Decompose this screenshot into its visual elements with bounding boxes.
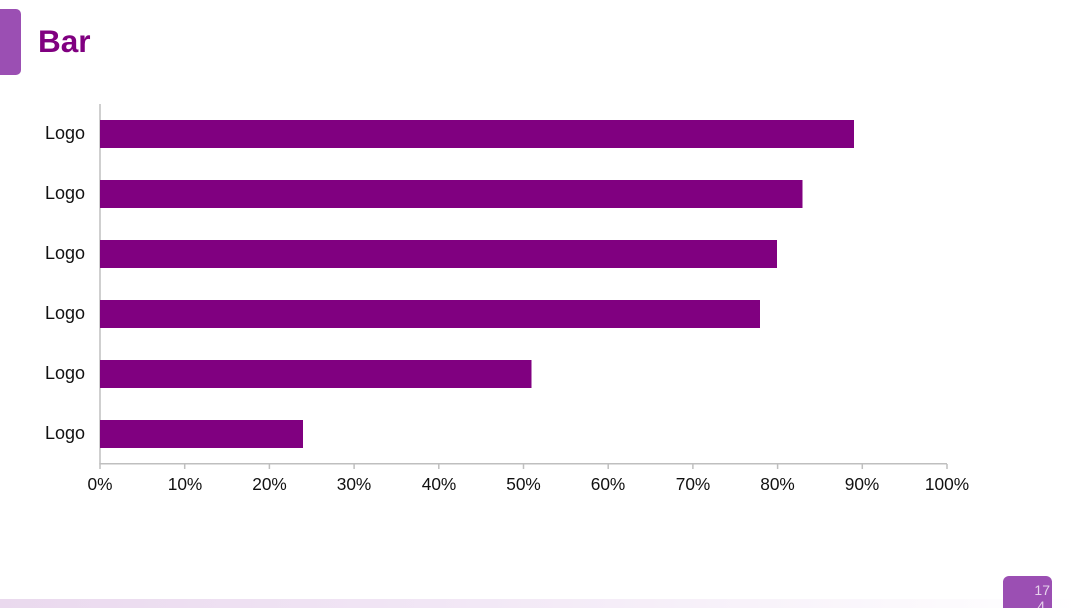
value labels: 30% (337, 474, 371, 494)
value labels: 40% (422, 474, 456, 494)
title: Bar (38, 23, 91, 59)
category labels: Logo (45, 303, 85, 323)
value labels (88, 474, 969, 494)
page number: 17 (1034, 582, 1050, 598)
value labels: 80% (760, 474, 795, 494)
page number badge (1003, 576, 1052, 608)
category labels: Logo (45, 123, 85, 143)
value labels: 20% (252, 474, 287, 494)
header accent tab (0, 9, 21, 75)
value labels: 100% (925, 474, 969, 494)
category labels: Logo (45, 423, 85, 443)
value labels: 10% (168, 474, 202, 494)
value labels: 60% (591, 474, 625, 494)
value axis (99, 464, 947, 469)
value labels: 90% (845, 474, 879, 494)
category labels: Logo (45, 363, 85, 383)
category labels (45, 123, 85, 443)
bars (100, 120, 854, 448)
category axis (99, 104, 101, 464)
category labels: Logo (45, 243, 85, 263)
category labels: Logo (45, 183, 85, 203)
value labels: 50% (506, 474, 541, 494)
page number (1034, 582, 1050, 608)
footer gradient band (0, 599, 1080, 608)
bar chart (45, 104, 969, 494)
value labels: 0% (88, 474, 112, 494)
value labels: 70% (676, 474, 710, 494)
